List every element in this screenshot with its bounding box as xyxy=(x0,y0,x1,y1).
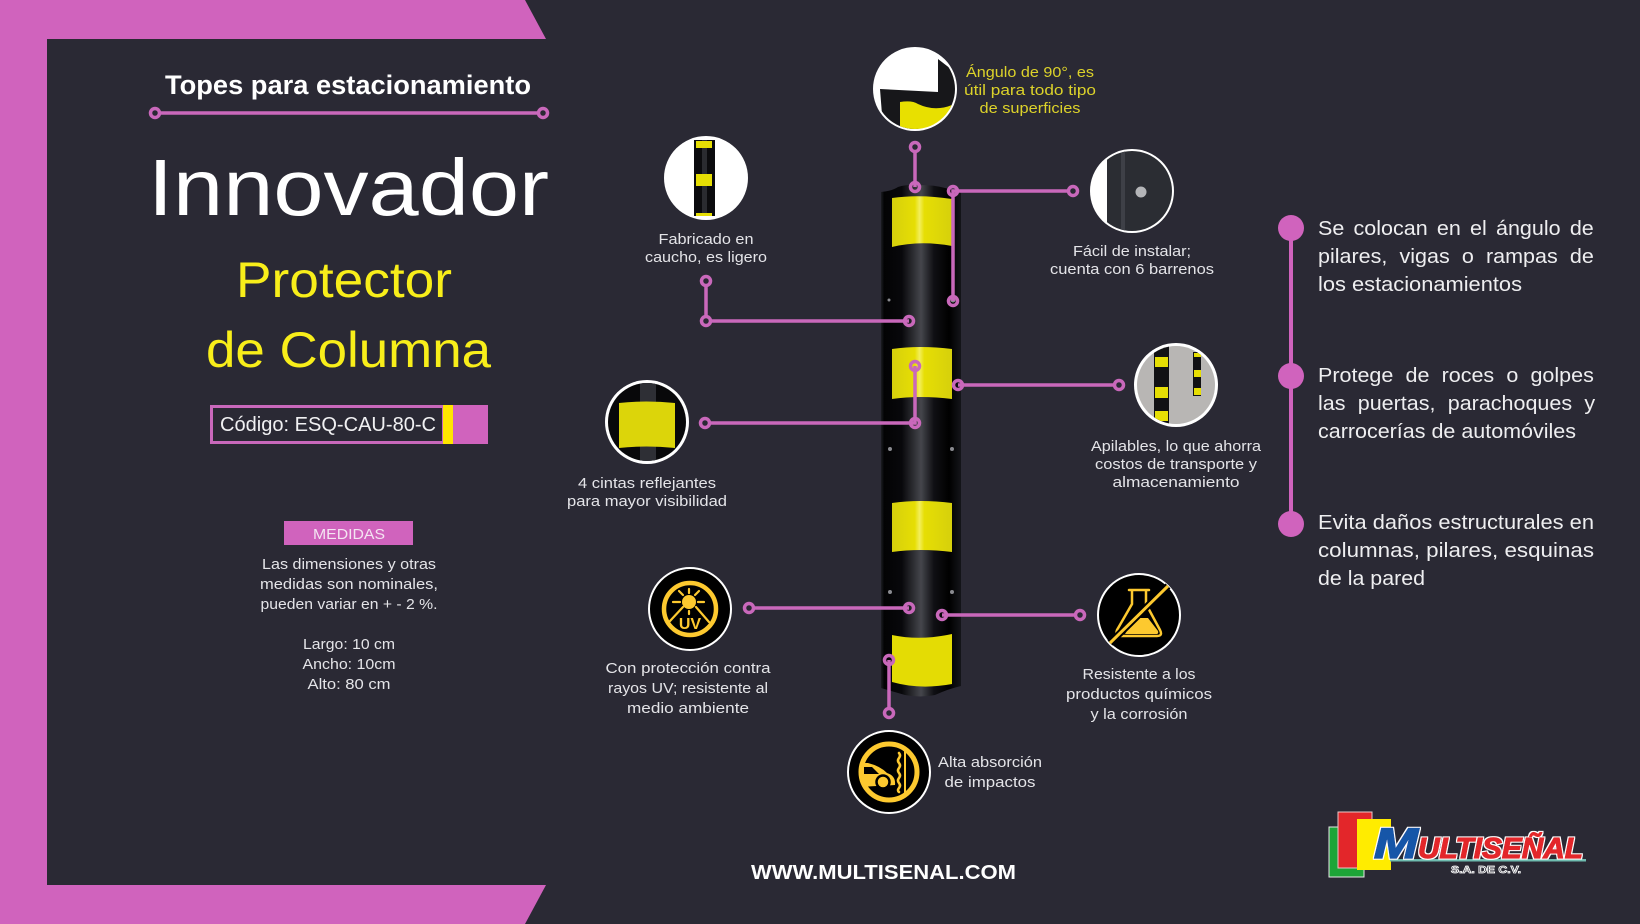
benefit 1 text: los estacionamientos xyxy=(1318,273,1522,296)
subtitle: Protector de Columna: de Columna xyxy=(206,322,491,378)
label: stackable xyxy=(1091,438,1262,491)
icon: UV protection xyxy=(649,568,731,650)
connector lines xyxy=(700,142,1124,718)
logo: Multiseñal: ULTISEÑAL xyxy=(1418,831,1583,865)
benefit 2 text: Protege de roces o golpes xyxy=(1318,364,1594,387)
title: Innovador: Innovador xyxy=(148,143,549,232)
label: easy install: cuenta con 6 barrenos xyxy=(1050,261,1214,278)
benefit 2 text xyxy=(1318,364,1596,443)
icon: chemical resistance xyxy=(1098,574,1180,656)
benefit 3 text xyxy=(1318,511,1594,590)
label: reflective: 4 cintas reflejantes xyxy=(578,475,716,492)
measurements badge: MEDIDAS xyxy=(313,526,385,543)
measurements text: Ancho: 10cm xyxy=(302,656,396,673)
label: angle xyxy=(964,64,1096,117)
reflective band 2 xyxy=(892,347,952,399)
icon: full rubber column xyxy=(664,136,748,220)
label: angle: Ángulo de 90°, es xyxy=(966,64,1094,81)
label: reflective: para mayor visibilidad xyxy=(567,493,727,510)
column protector product xyxy=(881,185,961,696)
benefits timeline xyxy=(1278,215,1304,537)
measurements text: pueden variar en + - 2 %. xyxy=(260,596,438,613)
label: chemicals xyxy=(1066,666,1212,723)
label: reflective xyxy=(567,475,727,510)
subtitle: Protector de Columna: Protector xyxy=(236,252,452,308)
label: stackable: almacenamiento xyxy=(1112,474,1240,491)
heading: product category xyxy=(150,70,548,118)
reflective band 3 xyxy=(892,501,952,552)
benefit 1 text: Se colocan en el ángulo de xyxy=(1318,217,1594,240)
logo: Multiseñal: M xyxy=(1374,820,1419,868)
benefit 1 text xyxy=(1318,217,1594,296)
logo: Multiseñal: S.A. DE C.V. xyxy=(1451,865,1521,876)
subtitle: Protector de Columna xyxy=(206,252,491,378)
label: chemicals: Resistente a los xyxy=(1082,666,1196,683)
measurements text: Alto: 80 cm xyxy=(308,676,390,693)
benefit 1 text: pilares, vigas o rampas de xyxy=(1318,245,1594,268)
measurements text: Las dimensiones y otras xyxy=(262,556,436,573)
label: stackable: costos de transporte y xyxy=(1095,456,1258,473)
label: UV: Con protección contra xyxy=(606,660,771,677)
icon: impact absorption xyxy=(848,731,930,813)
heading: product category: Topes para estacionamiento xyxy=(165,70,531,100)
label: angle: útil para todo tipo xyxy=(964,82,1096,99)
measurements text xyxy=(260,556,438,693)
icon: stackable columns photo xyxy=(1134,343,1218,427)
label: UV xyxy=(606,660,771,717)
label: impact xyxy=(938,754,1042,791)
icon: reflective tape xyxy=(605,380,689,464)
label: rubber: caucho, es ligero xyxy=(645,249,767,266)
benefit 3 text: columnas, pilares, esquinas xyxy=(1318,539,1594,562)
label: rubber xyxy=(645,231,767,266)
mounting holes xyxy=(888,298,956,594)
label: angle: de superficies xyxy=(980,100,1080,117)
measurements badge xyxy=(284,521,413,545)
label: UV: medio ambiente xyxy=(627,700,749,717)
reflective band 4 xyxy=(892,634,952,687)
label: UV: rayos UV; resistente al xyxy=(608,680,768,697)
label: impact: de impactos xyxy=(944,774,1036,791)
logo: Multiseñal xyxy=(1329,812,1586,877)
benefit 3 text: de la pared xyxy=(1318,567,1425,590)
label: easy install: Fácil de instalar; xyxy=(1073,243,1191,260)
product code box: Código: ESQ-CAU-80-C xyxy=(220,414,436,436)
icon: UV protection: UV xyxy=(679,616,701,633)
reflective band 1 xyxy=(892,196,952,247)
icon: 90 degree angle detail xyxy=(873,47,957,131)
label: stackable: Apilables, lo que ahorra xyxy=(1091,438,1262,455)
measurements text: Largo: 10 cm xyxy=(303,636,395,653)
label: chemicals: productos químicos xyxy=(1066,686,1212,703)
product code box xyxy=(212,405,488,444)
benefit 2 text: carrocerías de automóviles xyxy=(1318,420,1576,443)
label: easy install xyxy=(1050,243,1214,278)
benefit 2 text: las puertas, parachoques y xyxy=(1318,392,1596,415)
icon: mounting bolt detail xyxy=(1090,149,1174,233)
label: impact: Alta absorción xyxy=(938,754,1042,771)
label: rubber: Fabricado en xyxy=(658,231,754,248)
pink frame xyxy=(0,0,546,924)
website: WWW.MULTISENAL.COM xyxy=(751,862,1016,884)
measurements text: medidas son nominales, xyxy=(260,576,438,593)
label: chemicals: y la corrosión xyxy=(1090,706,1188,723)
benefit 3 text: Evita daños estructurales en xyxy=(1318,511,1594,534)
